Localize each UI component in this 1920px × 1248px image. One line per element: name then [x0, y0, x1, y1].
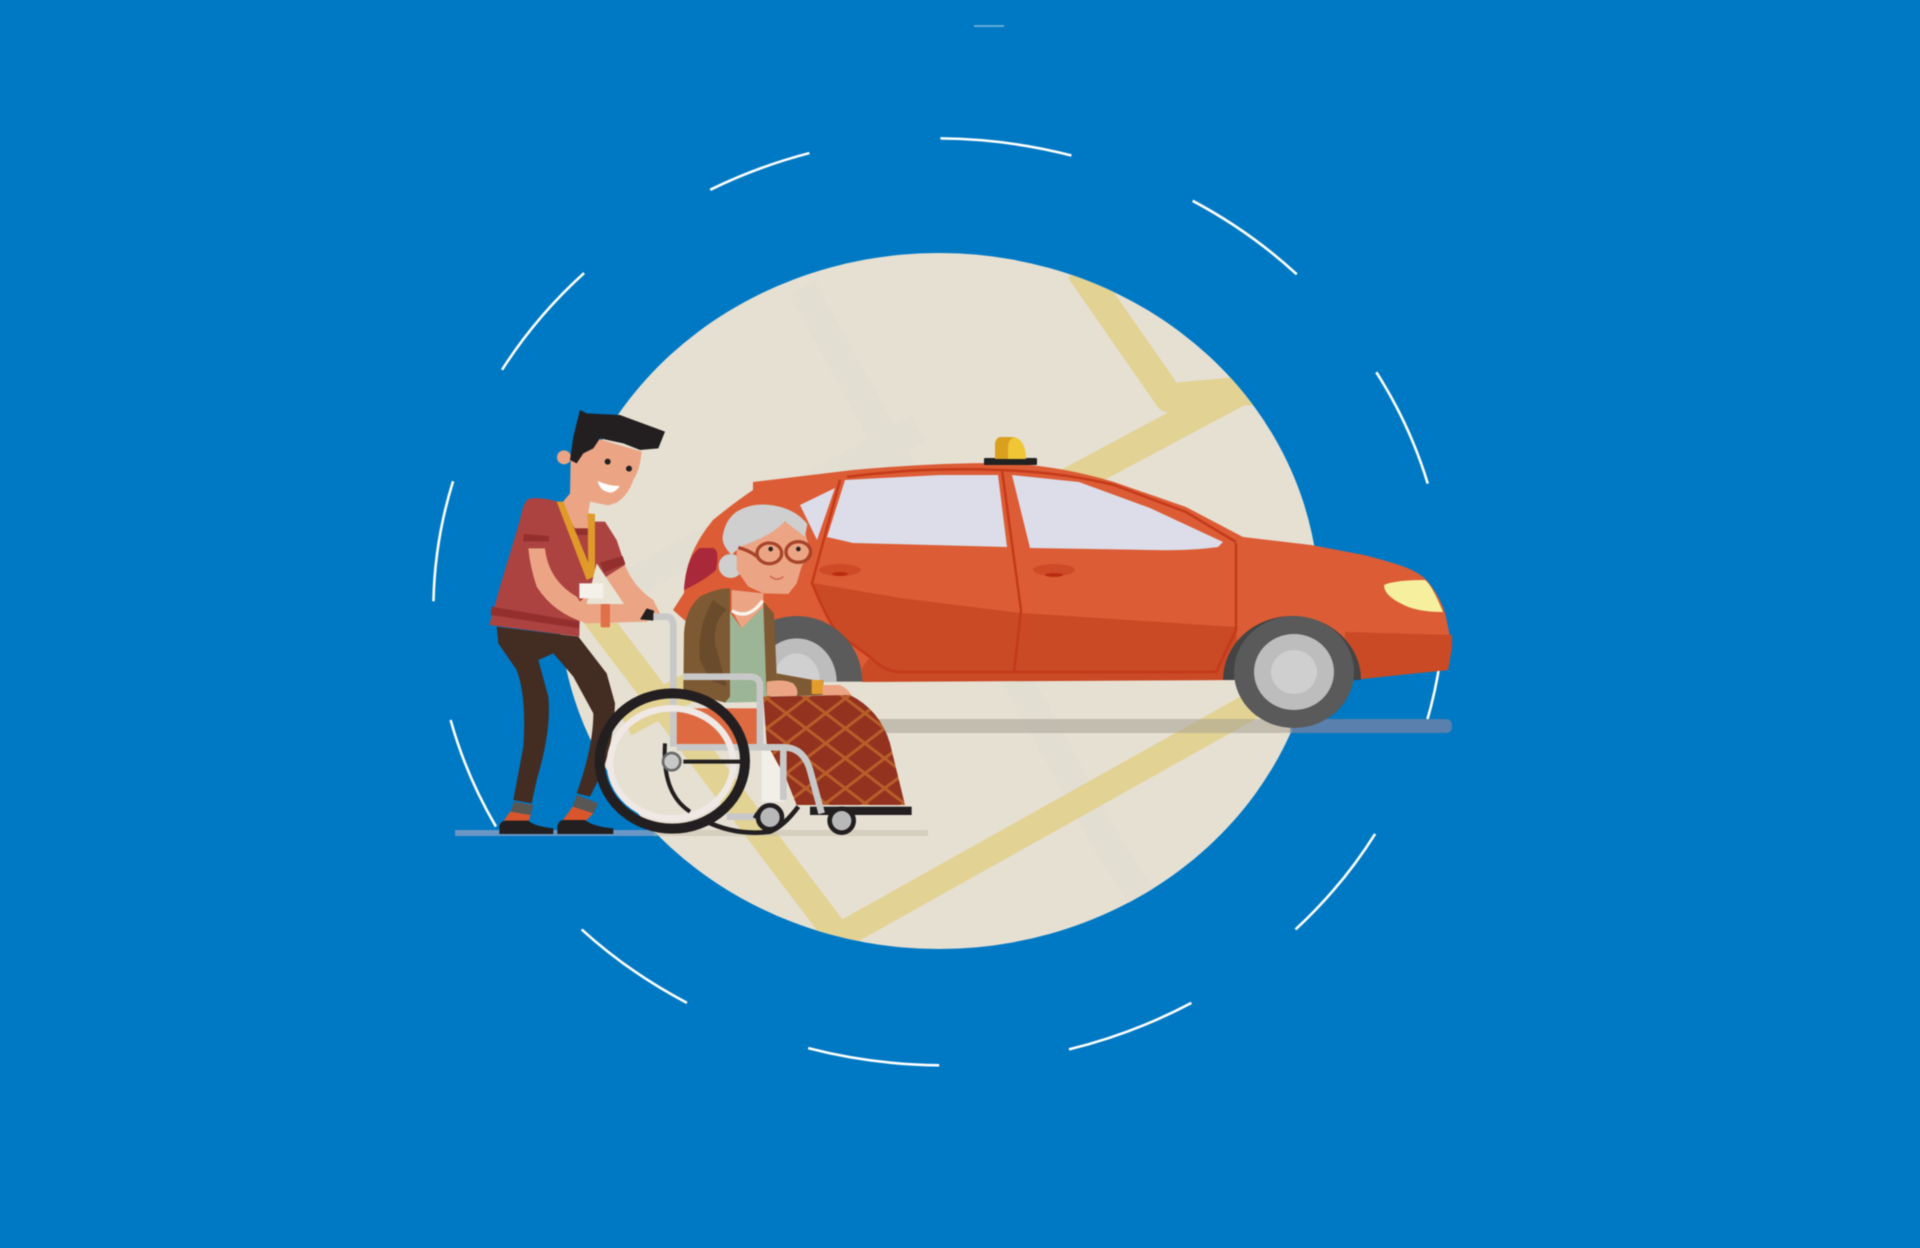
shirt	[489, 498, 625, 637]
footrest	[810, 807, 912, 815]
face	[737, 522, 810, 594]
necklace	[732, 601, 763, 614]
neck	[732, 590, 763, 628]
chassis curve	[707, 807, 798, 833]
car body	[673, 463, 1452, 682]
taxi roof sign	[984, 437, 1037, 465]
side windows	[800, 475, 1223, 550]
top speck	[974, 25, 1004, 27]
hub	[663, 753, 680, 770]
caster wheels	[758, 805, 854, 833]
carer	[489, 410, 665, 834]
ground line under people	[455, 830, 928, 836]
axle and stay	[665, 743, 740, 812]
figures, drawn in magnified coordinates	[489, 410, 912, 834]
trousers	[497, 627, 615, 803]
inner hand rim	[610, 708, 733, 818]
hair bun	[719, 554, 743, 578]
shirt stripes	[491, 528, 625, 628]
lower body shade	[812, 583, 1452, 682]
under-seat panel	[762, 748, 785, 802]
head	[557, 410, 665, 505]
tail light	[684, 548, 717, 590]
socks	[503, 807, 593, 822]
headlight	[1384, 580, 1443, 612]
frame	[653, 617, 822, 817]
id badge	[579, 563, 624, 604]
eyes	[768, 547, 801, 551]
sleeve and hands	[767, 673, 852, 697]
blanket	[763, 695, 905, 805]
taxi	[673, 437, 1452, 733]
cardigan fold	[699, 600, 727, 687]
door handles	[819, 564, 1075, 577]
wheelchair	[600, 617, 912, 833]
elderly woman	[677, 504, 905, 805]
shoes	[499, 820, 613, 834]
lanyard	[557, 502, 595, 580]
large wheel tyre	[600, 693, 745, 829]
smile	[770, 576, 783, 579]
dashed orbit ring	[433, 138, 1440, 1065]
seat cushion	[677, 708, 758, 745]
hair	[723, 504, 807, 555]
map disc	[559, 253, 1319, 949]
door lines and roof trim	[812, 469, 1236, 672]
trouser cuffs	[511, 795, 598, 815]
wristband	[601, 604, 610, 627]
car ground shadow	[877, 719, 1452, 733]
blouse	[725, 607, 767, 703]
arms	[528, 548, 660, 623]
front wheel	[1223, 616, 1361, 728]
rear wheel	[731, 616, 862, 682]
cardigan	[683, 588, 777, 703]
illustration: wheelchair user and carer beside a taxi	[431, 24, 1453, 1068]
glove	[640, 608, 654, 621]
map roads	[588, 269, 1261, 937]
neck	[562, 493, 590, 530]
glasses	[738, 542, 811, 564]
